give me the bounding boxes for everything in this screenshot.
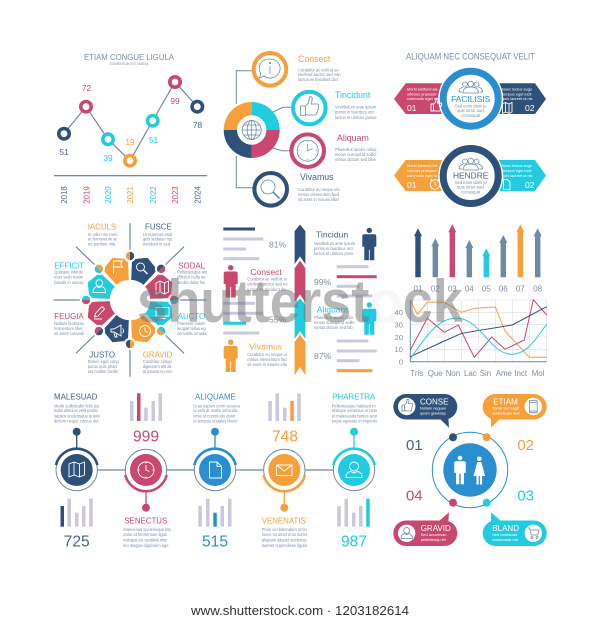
topic: Consect [298, 54, 341, 82]
right arrow text: tempus eget lucti [502, 91, 532, 96]
text: Aliquam: Phasellus iaculis odio [314, 315, 354, 320]
label: Efficit: blandit in suscip [54, 280, 84, 285]
text: Venenatis [262, 516, 308, 548]
bubble: Gravid [393, 512, 457, 546]
bars lower-left [223, 302, 263, 334]
year labels: 2024 [194, 186, 202, 204]
topic: Aliquam: Phasellus iaculis odioq [335, 147, 377, 152]
text: Aliquam: metus suscipit id sollic [314, 320, 354, 325]
bars upper-right [337, 265, 377, 298]
label: Iaculs: IACULS [88, 223, 116, 232]
arrow labels: 06 [499, 285, 508, 294]
year labels: 2022 [149, 186, 158, 204]
right arrow text: Nunc lectus augu [502, 86, 532, 92]
text: Senectus: Maecenas scelerisque bla [123, 527, 171, 532]
arrow labels: 07 [516, 285, 525, 294]
x axis labels: Mol [532, 369, 545, 378]
left arrow text: 01 [407, 180, 417, 190]
bubble: Etiam: scelerisque bed [492, 410, 520, 416]
left arrow text: ultricies praesent [407, 168, 437, 173]
x axis labels: Ame [496, 369, 513, 378]
node: envelope [264, 449, 305, 512]
hub text: Sed enim diam ju [455, 104, 487, 108]
bubble: Etiam: Tortor sed sagit [492, 406, 520, 410]
chart title [84, 53, 175, 66]
text: Tincidun [314, 229, 356, 256]
icon: map [502, 102, 512, 114]
dots [449, 433, 491, 507]
label: Gravid: Curabitur congu [143, 359, 172, 364]
watermark: shutterstock [137, 268, 464, 335]
right arrow text [502, 86, 535, 113]
text: Aliquame [193, 393, 240, 424]
chart grid [410, 300, 547, 362]
icon: person pink [224, 265, 238, 298]
text: Aliquame: id tempus sodales libero [193, 418, 238, 424]
label: Sodal: iaculis dolor fini [177, 280, 205, 285]
hub Hendre [438, 144, 503, 208]
text: Senectus: leo magna dignissim age [123, 543, 169, 548]
text: Pharetra: tristique senectus et netu [332, 408, 377, 413]
hub text [451, 94, 491, 118]
year labels: 2023 [171, 186, 180, 204]
icon: magnifier [261, 180, 280, 198]
topic: Consect: luctus ex tincidunt dict [298, 77, 339, 82]
label: Fusce: FUSCE [145, 223, 172, 232]
numbers: 01 [406, 437, 423, 454]
value 987: 987 [341, 534, 367, 551]
footer stock id: www.shutterstock.com · 1203182614 [190, 603, 409, 618]
icon: clock [297, 140, 318, 161]
label: Feugia: sit amet convalti [54, 331, 84, 336]
icon: woman [474, 456, 485, 484]
y axis labels: 30 [395, 320, 403, 330]
bars top-left [223, 228, 263, 260]
percentages: 81% [269, 240, 287, 250]
left arrow text: Morbi eleifend ele [407, 163, 438, 168]
percentages [269, 240, 332, 361]
right arrow text: quis laoreet ut nis [502, 173, 533, 178]
text: Senectus [123, 516, 171, 548]
label: Sodal: Pellentesque alo [177, 270, 208, 274]
arrow labels: 01 [414, 285, 423, 294]
year labels: 2021 [126, 186, 135, 204]
y axis labels [395, 308, 403, 366]
panel: people hub with speech bubbles [393, 394, 547, 546]
bubble: Conse: quam gravidap [420, 410, 446, 416]
text: Malesuad: MALESUAD [54, 393, 98, 402]
value 725: 725 [64, 534, 90, 551]
x axis labels: Lac [464, 369, 477, 378]
label: Sodal: efficitur nulla se [177, 274, 206, 280]
y axis labels: 10 [395, 345, 403, 354]
label: Aucto [177, 312, 207, 336]
x axis labels [410, 369, 545, 378]
right arrow text: quis laoreet ut nis [502, 96, 533, 101]
label: Gravid: GRAVID [143, 350, 173, 359]
right arrow text: Nunc lectus augu [502, 163, 532, 168]
topic: Consect: eleifend auctor sed non [298, 72, 341, 77]
trend line [64, 82, 197, 161]
text: Consect [247, 267, 288, 292]
hub text [453, 170, 489, 194]
mini bars 515 [198, 499, 232, 527]
segment icons [93, 261, 169, 337]
numbers [406, 437, 534, 505]
text: Vivamus: Curabitur eu neque ut [247, 352, 288, 357]
icon: man [454, 456, 466, 484]
year labels: 2020 [104, 186, 113, 204]
topic: Consect: Curabitur ac velit at se [298, 68, 339, 72]
text: Aliquame: urna ut commodo dolor [193, 414, 236, 418]
bubble: Bland: BLAND [492, 524, 519, 533]
bubble: Conse: CONSE [420, 397, 448, 406]
bars lower-right [337, 340, 377, 372]
text: Malesuad: Morbi sollicitudin felis jus [54, 404, 99, 408]
text: Senectus: volutpat eu vestibulumer [123, 538, 168, 542]
bubble: Bland: Sed malesuad [492, 532, 517, 537]
numbers: 02 [517, 437, 534, 454]
text: Pharetra: et malesuada fames acut [332, 414, 378, 418]
y axis labels: 40 [395, 308, 403, 317]
panel title: ALIQUAM NEC CONSEQUAT VELIT [406, 51, 535, 61]
topic: Tincidunt [335, 90, 377, 120]
panel: arrows and line chart [395, 224, 547, 378]
topic: Vivamus [298, 172, 340, 202]
data values [59, 83, 202, 163]
topic: Tincidunt: Vestibulum ante ipsum [335, 104, 377, 109]
left arrow text: commodo eget to [407, 173, 437, 178]
bubble: Gravid: pellentesqu fel [421, 537, 446, 542]
axis line [54, 175, 207, 176]
label: Efficit: EFFICIT [54, 261, 84, 270]
label: Aucto: feugiat tellus eg [177, 326, 206, 331]
topic: Tincidunt: Tincidunt [335, 90, 371, 100]
arrow labels: 08 [533, 285, 543, 294]
arrows bottom [394, 160, 546, 191]
text: Aliquame: ALIQUAME [195, 393, 236, 402]
text: Tincidun: primis in faucibus orci [314, 246, 353, 251]
text: Consect: Consect [250, 267, 282, 277]
text: Malesuad: nulla ultricies velit portat [54, 408, 99, 413]
icon: alarm clock [430, 179, 440, 189]
text: Tincidun: luctus et ultrices posu [314, 251, 353, 256]
data points [59, 77, 202, 166]
icon: document [504, 180, 510, 190]
panel: horizontal timeline [54, 393, 378, 551]
bubble: Conse: Nullam neguen [420, 406, 446, 410]
icon: people [459, 81, 482, 93]
panel: octagon wheel [54, 223, 208, 377]
mini bars 725 [60, 499, 93, 527]
label: Fusce [143, 223, 173, 246]
text: Pharetra: Pellentesque habitant m [332, 404, 376, 408]
x axis labels: Sin [480, 369, 491, 378]
ribbon arrows [294, 224, 306, 376]
left arrow text [407, 86, 438, 113]
y axis labels: 20 [395, 333, 403, 342]
donut [224, 102, 280, 158]
data values: 19 [125, 137, 135, 147]
text: Pharetra: PHARETRA [332, 393, 376, 402]
mini bars 987 [337, 499, 370, 527]
icon: info bubble [259, 59, 280, 78]
label: Justo: purus quis phart [88, 364, 118, 369]
icon: thumbs up [300, 97, 319, 116]
text: Aliquame: Cras sapien enim venena [193, 404, 240, 408]
text: Consect: Curabitur ac velit at si [247, 276, 287, 282]
hub text: Sed enim diam ju [455, 180, 487, 185]
text: Aliquam [314, 304, 354, 330]
label: Iaculs: In odio nisi comi [88, 232, 117, 237]
text: Venenatis: Proin vel bibendum orcin [262, 527, 307, 532]
topic: Vivamus: sit amet in mauris ellar [298, 197, 340, 202]
label: Justo [88, 350, 119, 374]
label: Iaculs: et fermentum at [88, 236, 118, 242]
label: Feugia [54, 312, 84, 336]
rings [254, 53, 326, 206]
icon: person orange [224, 340, 238, 372]
icon: people [459, 158, 482, 170]
hub text: FACILISIS [451, 94, 491, 104]
topic: Vivamus: metus elementum facil [298, 192, 339, 197]
icon: person cyan [362, 302, 376, 335]
label: Feugia: fermentum liber [54, 326, 83, 331]
label: Gravid: dignissim elit ali [143, 364, 171, 369]
text: Vivamus: Vivamus [249, 341, 282, 351]
arrow labels: 02 [431, 285, 440, 294]
x axis labels: Que [428, 369, 443, 378]
bubble: Gravid: Sed accumsan [421, 532, 446, 537]
arrow bars [414, 224, 542, 277]
left arrow text [407, 163, 438, 190]
hub text: quis tortor auct [457, 185, 485, 190]
left arrow text: ultricies praesent [407, 91, 437, 96]
text: Venenatis: laoreet cupendisse ligula [262, 543, 307, 548]
x axis labels: Tris [410, 369, 423, 378]
y axis labels: 0 [399, 358, 403, 366]
data values: 39 [103, 153, 113, 163]
bubble: Conse [393, 394, 457, 428]
bubble: Etiam [483, 394, 547, 428]
value 515: 515 [202, 534, 228, 551]
bubble: Gravid: GRAVID [421, 524, 451, 533]
data values: 78 [193, 120, 202, 130]
label: Iaculs: ne porttitor vita [88, 242, 116, 246]
right arrow text: tempus eget lucti [502, 168, 532, 173]
center disc [443, 443, 497, 497]
node: document [194, 428, 236, 491]
bubble: Bland [483, 512, 547, 546]
panel: line chart by year [54, 53, 207, 204]
chart axes [410, 300, 547, 362]
mini bars 748 [268, 393, 301, 421]
text: Vivamus: metus elementum faci [247, 357, 287, 362]
percentages: 55% [269, 314, 287, 324]
left arrow text: 01 [407, 103, 417, 113]
right arrow text: 02 [525, 180, 535, 190]
bubble: Etiam: ETIAM [493, 397, 518, 406]
text: Consect: luctus ex tincidunt dic [247, 287, 286, 292]
panel: two hub circles with arrows [394, 51, 546, 208]
left arrow text: Morbi eleifend ele [407, 86, 438, 92]
icon: globe [242, 120, 261, 140]
data values: 51 [149, 135, 158, 145]
arrow labels [414, 285, 543, 294]
spokes [54, 223, 206, 377]
label: Fusce: quis sodales nuı [143, 236, 172, 242]
arrow labels: 03 [448, 285, 457, 294]
bubble: Bland: malesuada nisi [492, 537, 518, 542]
node: map [56, 428, 97, 491]
text: Pharetra [332, 393, 378, 424]
panel: vertical ribbon with people [223, 224, 377, 376]
text: Vivamus [247, 341, 288, 367]
label: Fusce: tincidunt in sed [143, 242, 171, 246]
label: Efficit: Quisque interdu [54, 270, 83, 274]
label: Justo: JUSTO [89, 350, 115, 359]
panel: donut with four topics [224, 53, 377, 206]
text: Senectus: SENECTUS [124, 516, 167, 525]
right arrow text: 02 [525, 103, 535, 113]
numbers: 03 [517, 488, 534, 505]
topic: Vivamus: Vivamus [300, 172, 334, 182]
connectors [236, 71, 292, 188]
year labels [60, 186, 202, 204]
chart title: ELEMENTUM EST MASSA [109, 62, 149, 66]
label: Aucto: AUCTO [178, 312, 205, 321]
arrow labels: 05 [482, 285, 491, 294]
label: Fusce: Ut euismod esta [143, 232, 173, 237]
hub text: consequat [461, 190, 481, 194]
label: Sodal: SODAL [178, 261, 206, 270]
text: Vivamus: sit amet in mauris ella [247, 362, 288, 367]
series lines [410, 300, 547, 359]
hub text: quis tortor auct [457, 108, 485, 113]
arrow labels: 04 [465, 285, 474, 294]
topic: Aliquam [335, 133, 377, 162]
text: Venenatis: fusce sit amet eros somo [262, 532, 308, 537]
node: user [333, 428, 375, 491]
text: Senectus: dolor id fermentum ligun [123, 532, 168, 537]
text: Aliquame: id velit at mollis vehicula [193, 408, 238, 413]
numbers: 04 [406, 488, 423, 505]
topic: Vivamus: Curabitur eu neque ulo [298, 187, 340, 192]
bicolor dots [80, 250, 180, 350]
mini bars 999 [130, 393, 162, 421]
topic: Tincidunt: primis in faucibus orci [335, 110, 374, 114]
topic: Tincidunt: luctus et ultrices posue [335, 115, 377, 120]
data values: 51 [59, 147, 69, 157]
timeline connectors [97, 469, 333, 471]
outer ring [432, 432, 508, 508]
hub text: consequat [461, 113, 481, 118]
text: Aliquam: Aliquam [317, 304, 348, 314]
label: Feugia: Nullam facilisisa [54, 321, 84, 326]
topic: Aliquam: metus suscipit id sollici [335, 152, 376, 157]
text: Pharetra: turpis egestas in imperdo [332, 418, 378, 424]
text: Venenatis: aliquam aliquet scelerisq [262, 538, 307, 542]
value 999: 999 [133, 429, 159, 446]
x axis labels: Non [446, 369, 460, 378]
percentages: 87% [314, 351, 332, 361]
chart title: ETIAM CONGUE LIGULA [84, 53, 175, 62]
year labels: 2019 [82, 186, 92, 204]
icon: person navy [362, 228, 376, 260]
value 748: 748 [272, 429, 298, 446]
label: Justo: est nullam facilis [88, 369, 118, 374]
topic: Aliquam: metus dictum sed bibe [335, 157, 377, 162]
text: Consect: eleifend auctor sed no [247, 282, 288, 286]
year labels: 2018 [60, 186, 69, 204]
text: Malesuad: dictum neque cursus dui [54, 418, 98, 424]
data values: 72 [82, 83, 91, 93]
topic: Consect: Consect [298, 54, 331, 64]
label: Gravid [143, 350, 173, 374]
text: Tincidun: Tincidun [316, 229, 348, 239]
hub Facilisis [438, 66, 503, 131]
text: Tincidun: Vestibulum ante ipsum [314, 241, 356, 246]
label: Aucto: Praesent eulsm [177, 321, 206, 326]
label: Sodal [177, 261, 208, 285]
icon: thumbs up [431, 98, 442, 111]
label: Efficit [54, 261, 84, 285]
x axis labels: Inct [514, 369, 528, 378]
percentages: 99% [314, 277, 332, 287]
label: Gravid: id massa eu min [143, 369, 173, 374]
label: Iaculs [88, 223, 118, 246]
node: clock [125, 449, 167, 512]
label: Aucto: convallis ornada [177, 331, 207, 336]
right arrow text [502, 163, 535, 190]
text: Malesuad [54, 393, 101, 424]
hub text: HENDRE [453, 170, 489, 180]
left arrow text: commodo eget to [407, 96, 437, 101]
wheel segments [82, 252, 178, 348]
text: Venenatis: VENENATIS [262, 516, 306, 525]
text: Aliquam: metus dictum sed bib [314, 325, 353, 330]
topic: Aliquam: Aliquam [337, 133, 369, 143]
arrows top [394, 83, 546, 114]
text: Malesuad: sapien scelerisque quisto [54, 414, 101, 418]
label: Feugia: FEUGIA [54, 312, 84, 321]
data values: 99 [170, 96, 180, 106]
label: Justo: Donec eget cong [88, 359, 119, 364]
label: Efficit: eros sed-niusim [54, 274, 84, 280]
